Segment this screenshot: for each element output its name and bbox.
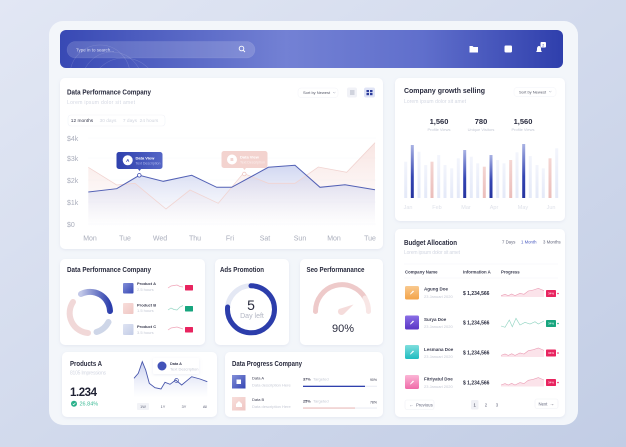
product C: 3.5 hours xyxy=(137,330,154,335)
panel: products A xyxy=(62,352,217,417)
month labels: Feb xyxy=(432,205,442,211)
tooltip: data A: Data A xyxy=(170,362,182,366)
sort dropdown: Sort by Newest xyxy=(303,90,331,95)
stat: unique visitors xyxy=(468,117,494,132)
row: Surya Doe xyxy=(405,316,559,330)
dashboard frame xyxy=(49,21,578,425)
stat: profile views 2: 1,560 xyxy=(514,117,532,126)
sort dropdown xyxy=(298,88,338,98)
row: data B: 78% xyxy=(370,400,377,404)
product A xyxy=(123,281,193,294)
tooltip: data view A: Text Description xyxy=(136,162,160,166)
area chart xyxy=(88,143,375,226)
subheading: Lorem ipsum dolor sit amet xyxy=(404,250,461,256)
icon: inbox xyxy=(504,46,512,52)
range labels: 3Y xyxy=(182,405,187,409)
time range tabs xyxy=(68,115,165,126)
table header: Progress xyxy=(501,269,520,274)
heading: Data Performance Company xyxy=(67,265,151,274)
icon: folder xyxy=(470,46,478,52)
tooltip: data view B xyxy=(222,151,268,170)
tooltip: data view A: Data View xyxy=(136,156,155,160)
row: Fitriyatul Doe: Fitriyatul Doe xyxy=(424,376,453,382)
x axis labels: Sun xyxy=(294,236,306,242)
range tabs xyxy=(502,240,561,245)
time range tabs: 7 days xyxy=(123,118,138,124)
pagination: 1 xyxy=(474,402,477,408)
stat: profile views xyxy=(427,117,451,132)
y axis labels: $3k xyxy=(67,156,79,163)
heading: Products A xyxy=(70,359,102,368)
stat: profile views 2: Profile Views xyxy=(511,127,535,132)
table header: Information A xyxy=(463,269,491,274)
days left value: Day left xyxy=(240,313,264,320)
y axis labels: $4k xyxy=(67,136,79,143)
row: Agung Doe xyxy=(405,286,559,300)
time range tabs: 12 months xyxy=(71,118,94,124)
x axis labels: Mon xyxy=(83,236,97,242)
growth indicator xyxy=(71,401,98,408)
heading: Seo Performanance xyxy=(306,265,364,274)
row: Surya Doe: 34% xyxy=(548,322,554,326)
pagination: Next xyxy=(538,402,548,406)
pagination: → xyxy=(550,402,554,408)
pagination: 3 xyxy=(496,402,499,408)
month labels xyxy=(404,205,555,211)
x axis labels: Tue xyxy=(119,236,131,242)
row: Lesmana Doe xyxy=(405,345,559,359)
stat: profile views: 1,560 xyxy=(430,117,448,126)
search box xyxy=(67,42,255,58)
icon: bell with badge xyxy=(536,42,546,52)
row: Agung Doe: $ 1,234,566 xyxy=(463,291,490,297)
row: data B: Data description Here xyxy=(252,404,291,409)
days left value: 5 xyxy=(247,297,255,313)
tooltip: data view B: Text Description xyxy=(240,160,265,164)
row: data B: Data B xyxy=(252,397,265,402)
sort dropdown xyxy=(514,88,556,96)
row: data A: Targeted xyxy=(313,376,329,382)
row: Surya Doe: Surya Doe xyxy=(424,317,447,322)
row: Agung Doe: Agung Doe xyxy=(424,286,448,292)
range tabs: 1 Month xyxy=(521,240,537,245)
row: data A: Data A xyxy=(252,376,264,380)
panel: data performance donut xyxy=(60,259,205,345)
stat: unique visitors: 780 xyxy=(475,117,487,126)
month labels: Jun xyxy=(547,205,555,211)
stat: profile views: Profile Views xyxy=(427,127,451,132)
days left value xyxy=(240,297,264,320)
x axis labels: Thu xyxy=(189,236,201,242)
y axis labels: $2k xyxy=(67,178,79,185)
time range tabs: 24 hours xyxy=(140,118,159,124)
time range tabs: 30 days xyxy=(100,118,117,124)
product A: Product A xyxy=(137,281,156,286)
range tabs: 7 Days xyxy=(502,240,515,245)
panel: budget allocation xyxy=(395,229,565,417)
product B: Product B xyxy=(137,302,156,308)
product B xyxy=(123,302,193,314)
row: Lesmana Doe: 23 Januari 2020 xyxy=(424,354,453,359)
panel: seo performance xyxy=(300,259,383,345)
tooltip: data A: Text Description xyxy=(170,366,198,372)
tooltip: data view B: B xyxy=(230,157,234,162)
search box: Type in to search... xyxy=(76,48,114,52)
range labels: All xyxy=(203,405,207,409)
y axis labels: $1k xyxy=(67,200,79,207)
row: Fitriyatul Doe: $ 1,234,566 xyxy=(463,380,490,386)
subheading: 8105 Impressions xyxy=(70,370,106,376)
row: data A: Data description Here xyxy=(252,382,291,388)
y axis labels xyxy=(67,136,79,229)
heading: Budget Allocation xyxy=(404,238,457,247)
row: Fitriyatul Doe xyxy=(405,375,559,389)
heading: Data Progress Company xyxy=(232,359,302,368)
x axis labels: Tue xyxy=(364,236,376,242)
product B: 1.5 hours xyxy=(137,308,154,313)
icon: list view xyxy=(347,88,357,98)
row: data B: 25% xyxy=(303,400,311,404)
row: Surya Doe: $ 1,234,566 xyxy=(463,321,490,327)
icon: grid view xyxy=(364,88,375,98)
subheading: Lorem ipsum dolor sit amet xyxy=(404,99,467,105)
heading: Data Performance Company xyxy=(67,88,151,96)
subheading: Lorem ipsum dolor sit amet xyxy=(67,100,136,106)
x axis labels: Fri xyxy=(226,236,235,242)
y axis labels: $0 xyxy=(67,222,75,229)
range labels xyxy=(137,403,207,410)
heading: Company growth selling xyxy=(404,86,485,95)
panel: data progress company xyxy=(225,352,383,417)
gauge value: 90% xyxy=(332,323,354,335)
row: data A xyxy=(232,375,377,388)
row: Agung Doe: 34% xyxy=(548,292,554,296)
month labels: Mar xyxy=(461,205,471,211)
icon: bell with badge: 2 xyxy=(542,43,544,47)
pagination: ← xyxy=(410,402,414,408)
tooltip: data view A xyxy=(116,152,162,171)
gauge xyxy=(315,285,369,312)
x axis labels xyxy=(83,236,376,242)
panel: company growth selling xyxy=(395,78,565,221)
month labels: May xyxy=(518,205,528,211)
row: Agung Doe: 23 Januari 2020 xyxy=(424,294,453,299)
table header: Company Name xyxy=(405,269,438,274)
row: Surya Doe: 23 Januari 2020 xyxy=(424,324,453,329)
panel: data performance main chart xyxy=(60,78,383,249)
product C xyxy=(123,324,193,335)
pagination xyxy=(405,399,558,410)
month labels: Apr xyxy=(490,205,498,211)
donut chart xyxy=(70,292,110,333)
row: Lesmana Doe: $ 1,234,566 xyxy=(463,351,490,357)
row: data B: Targeted xyxy=(313,398,329,404)
pagination: Previous xyxy=(416,402,433,408)
x axis labels: Wed xyxy=(153,236,167,242)
range labels: 1W xyxy=(140,405,146,409)
heading: Ads Promotion xyxy=(220,265,264,274)
stat: profile views 2 xyxy=(511,117,535,132)
row: Lesmana Doe: Lesmana Doe xyxy=(424,347,454,352)
row: Fitriyatul Doe: 34% xyxy=(548,381,554,385)
ring progress xyxy=(227,286,274,333)
value: 1.234 xyxy=(70,387,98,399)
gauge needle xyxy=(338,304,354,315)
range labels: 1Y xyxy=(161,405,166,409)
x axis labels: Sat xyxy=(260,236,270,242)
row: data B xyxy=(232,397,377,410)
product C: Product C xyxy=(137,324,156,329)
growth indicator: 26.84% xyxy=(80,402,98,408)
bar chart xyxy=(404,144,558,198)
header bar xyxy=(60,30,563,68)
tooltip: data A xyxy=(153,358,199,374)
sort dropdown: Sort by Newest xyxy=(519,89,547,94)
row: Lesmana Doe: 34% xyxy=(548,351,554,355)
tooltip: data view A: A xyxy=(126,158,130,163)
stat: unique visitors: Unique Visitors xyxy=(468,127,494,132)
x axis labels: Mon xyxy=(327,236,341,242)
month labels: Jan xyxy=(404,205,412,211)
row: data A: 90% xyxy=(370,378,377,382)
tooltip: data view B: Data View xyxy=(240,154,260,160)
table header xyxy=(405,269,520,274)
pagination: 2 xyxy=(485,402,488,408)
panel: ads promotion xyxy=(215,259,289,345)
row: data A: 37% xyxy=(303,378,311,382)
range tabs: 3 Months xyxy=(543,240,561,245)
line chart xyxy=(134,362,207,398)
row: Fitriyatul Doe: 23 Januari 2020 xyxy=(424,384,453,389)
product A: 2.5 hours xyxy=(137,287,154,292)
